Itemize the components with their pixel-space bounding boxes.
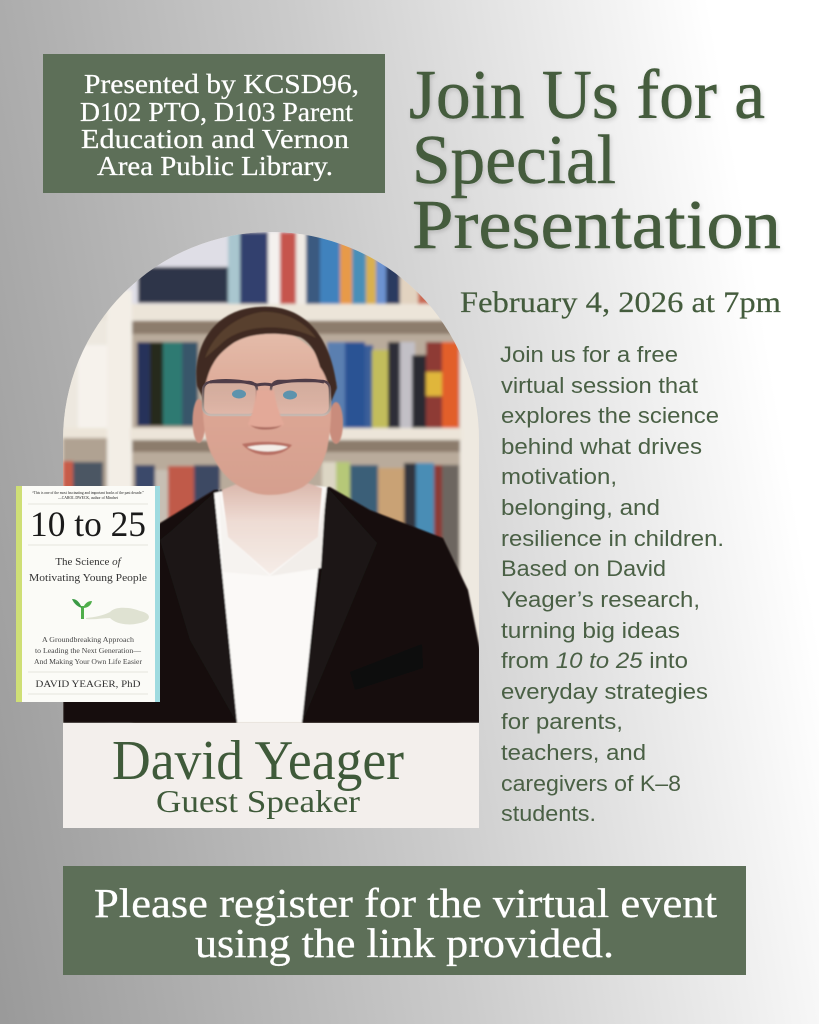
- panel: presenters: Area Public Library.: [97, 151, 333, 181]
- panel: presenters: D102 PTO, D103 Parent: [80, 97, 354, 127]
- shelf frame: [106, 290, 134, 486]
- book cover: [16, 486, 160, 702]
- description text: [500, 342, 724, 826]
- book cover: 10 to 25: [30, 504, 146, 544]
- description text: motivation,: [501, 464, 617, 489]
- description text: belonging, and: [501, 495, 660, 520]
- title: Join Us for a: [409, 57, 765, 134]
- description text: caregivers of K–8: [501, 771, 681, 796]
- panel: speaker name: [63, 723, 479, 828]
- title: Presentation: [412, 187, 781, 264]
- description text: virtual session that: [501, 373, 698, 398]
- panel: registration call to action: using the link provided.: [195, 920, 614, 966]
- description text: explores the science: [501, 403, 719, 428]
- glasses: [203, 380, 330, 415]
- book cover: And Making Your Own Life Easier: [34, 658, 143, 666]
- icon: seedling: [72, 599, 149, 624]
- head: [192, 307, 343, 495]
- title: [409, 57, 781, 264]
- book cover: The Science of: [55, 556, 123, 568]
- title: Special: [412, 122, 616, 199]
- description text: resilience in children.: [501, 526, 724, 551]
- panel: presenters: [43, 54, 385, 193]
- description text: students.: [501, 801, 596, 826]
- panel: speaker name: Guest Speaker: [156, 783, 360, 819]
- middle row books: [137, 342, 150, 426]
- panel: presenters: Presented by KCSD96,: [84, 69, 359, 99]
- top row books: [138, 267, 228, 303]
- description text: Yeager’s research,: [501, 587, 700, 612]
- panel: speaker name: David Yeager: [112, 730, 404, 792]
- description text: for parents,: [501, 709, 623, 734]
- book cover: A Groundbreaking Approach: [42, 636, 135, 644]
- panel: registration call to action: Please register for the virtual event: [94, 880, 718, 926]
- face details: [242, 390, 292, 455]
- date and time: February 4, 2026 at 7pm: [460, 286, 781, 319]
- book cover: —CAROL DWECK, author of Mindset: [57, 496, 118, 501]
- book cover: “This is one of the most fascinating and important books of the past decade.”: [32, 490, 144, 495]
- book cover: to Leading the Next Generation—: [35, 647, 142, 655]
- panel: registration call to action: [63, 866, 746, 975]
- description text: behind what drives: [501, 434, 702, 459]
- description text: teachers, and: [501, 740, 646, 765]
- book cover: Motivating Young People: [29, 572, 147, 584]
- book cover: DAVID YEAGER, PhD: [36, 680, 141, 690]
- description text: turning big ideas: [501, 618, 680, 643]
- description text: Join us for a free: [500, 342, 678, 367]
- lower row books: [63, 460, 76, 486]
- jacket and shirt: [63, 470, 480, 723]
- speaker: [63, 307, 480, 723]
- description text: Based on David: [501, 556, 666, 581]
- panel: presenters: Education and Vernon: [81, 124, 350, 154]
- description text: everyday strategies: [501, 679, 708, 704]
- photo: speaker in front of bookshelf: [63, 225, 483, 730]
- description text: from 10 to 25 into: [501, 648, 688, 673]
